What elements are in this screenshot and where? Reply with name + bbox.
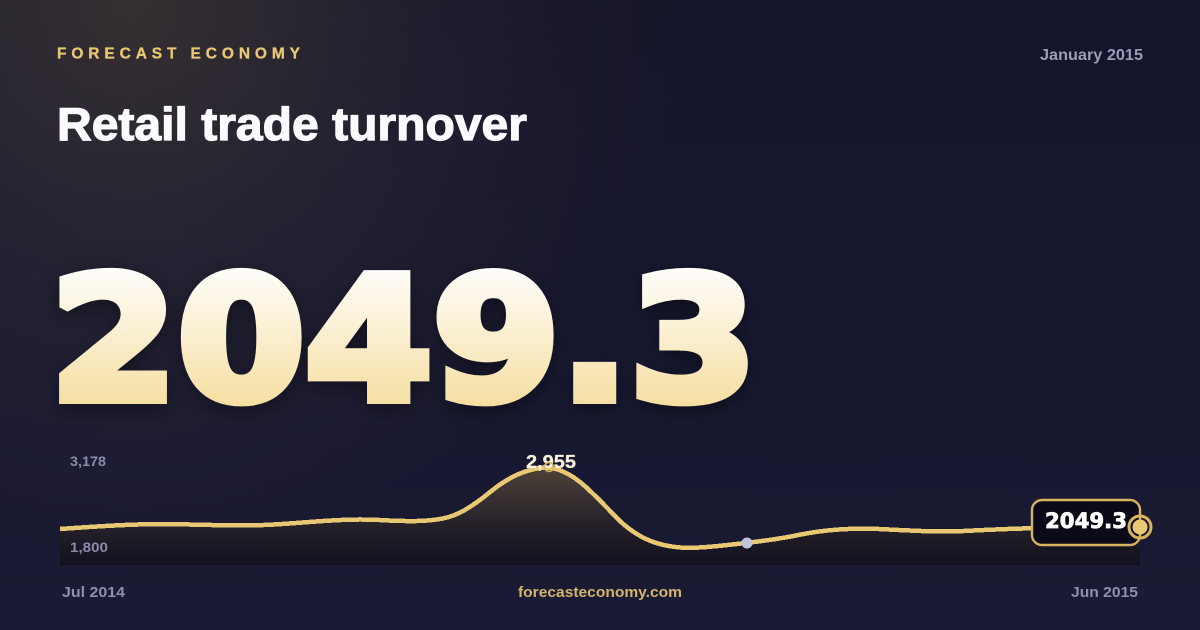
- main value: 2049.3: [50, 242, 757, 440]
- mid marker: [742, 538, 752, 548]
- start date label: Jul 2014: [62, 584, 126, 601]
- axis min label: 1,800: [70, 540, 108, 555]
- end marker: [1129, 516, 1151, 538]
- trend line: [60, 468, 1140, 548]
- brand label: FORECAST ECONOMY: [57, 46, 301, 62]
- title: Retail trade turnover: [57, 98, 527, 150]
- current value tag: 2049.3: [1045, 509, 1127, 533]
- source url: forecasteconomy.com: [518, 584, 682, 601]
- axis max label: 3,178: [70, 454, 107, 469]
- area under line: [60, 468, 1140, 565]
- peak value label: 2,955: [526, 452, 576, 472]
- peak marker: [544, 462, 554, 472]
- current value tag: [1032, 500, 1140, 545]
- sparkline chart: [60, 452, 1151, 565]
- end date label: Jun 2015: [1071, 584, 1138, 601]
- date label: January 2015: [1040, 47, 1143, 64]
